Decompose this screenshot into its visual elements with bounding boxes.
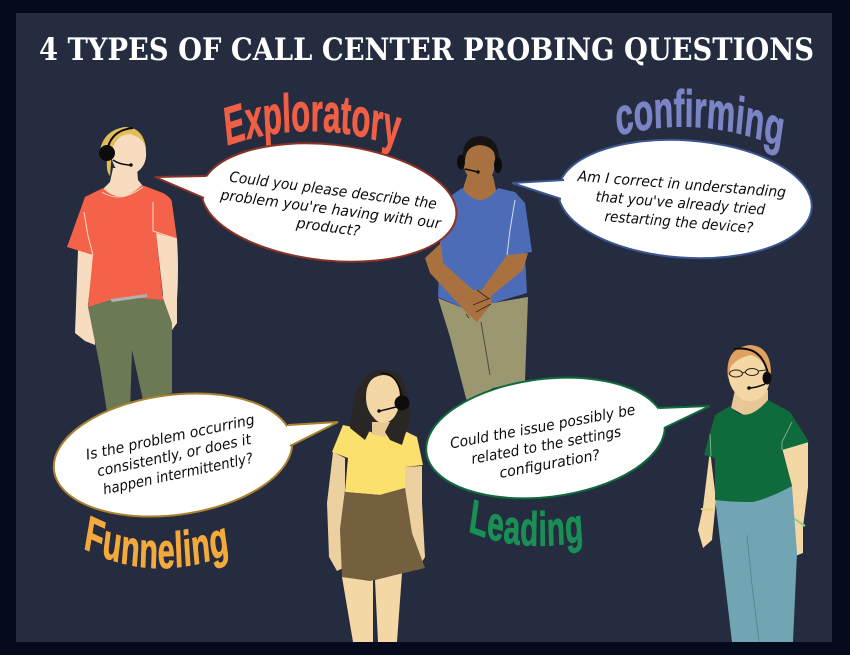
head xyxy=(728,350,770,401)
shirt xyxy=(438,188,532,308)
speech bubble: funneling question xyxy=(46,380,338,530)
belt xyxy=(110,294,147,302)
question text xyxy=(449,401,644,490)
question text: restarting the device? xyxy=(604,208,754,237)
neck xyxy=(372,415,395,437)
trousers xyxy=(88,298,172,412)
question text: configuration? xyxy=(498,447,602,482)
agent 1: orange shirt xyxy=(67,127,178,412)
headset xyxy=(377,373,410,413)
question text: Am I correct in understanding xyxy=(576,168,787,201)
arms xyxy=(327,452,345,571)
legs xyxy=(342,573,402,642)
hair xyxy=(463,136,499,160)
trousers xyxy=(715,486,797,642)
head xyxy=(463,142,495,186)
agent 2: blue shirt xyxy=(425,136,532,402)
question text: product? xyxy=(294,215,361,240)
question text: Is the problem occurring xyxy=(84,411,256,464)
agent 3: yellow shirt xyxy=(327,370,425,642)
question text: problem you're having with our xyxy=(218,186,443,233)
question text: Could you please describe the xyxy=(228,169,438,213)
arms xyxy=(425,243,492,322)
glasses xyxy=(730,368,766,377)
question text xyxy=(84,411,264,500)
label: confirming: confirming xyxy=(616,88,784,156)
question text: Could the issue possibly be xyxy=(449,401,637,452)
speech bubble: leading question xyxy=(419,365,710,511)
head xyxy=(366,375,400,423)
question text: consistently, or does it xyxy=(96,431,254,480)
hair xyxy=(727,345,771,378)
question text xyxy=(216,168,445,250)
hair xyxy=(100,127,146,176)
hair xyxy=(350,370,410,445)
skirt xyxy=(340,488,425,581)
speech bubble: confirming question xyxy=(512,132,816,266)
headset xyxy=(457,154,502,174)
label: Funneling: Funneling xyxy=(84,516,228,569)
headset xyxy=(734,349,772,390)
agent 4: green shirt xyxy=(698,345,809,642)
shirt xyxy=(332,425,423,495)
speech bubble: exploratory question xyxy=(155,131,462,274)
arms xyxy=(698,450,716,548)
question text xyxy=(573,168,787,239)
shirt xyxy=(704,400,809,502)
question text: that you've already tried xyxy=(595,188,766,219)
question text: related to the settings xyxy=(470,423,623,468)
shirt xyxy=(67,185,177,307)
headset xyxy=(99,128,133,167)
neck xyxy=(731,390,768,420)
label: Exploratory: Exploratory xyxy=(224,92,402,154)
question text: happen intermittently? xyxy=(101,450,255,498)
head xyxy=(111,133,146,176)
label: Leading: Leading xyxy=(470,499,582,554)
trousers xyxy=(438,297,528,402)
